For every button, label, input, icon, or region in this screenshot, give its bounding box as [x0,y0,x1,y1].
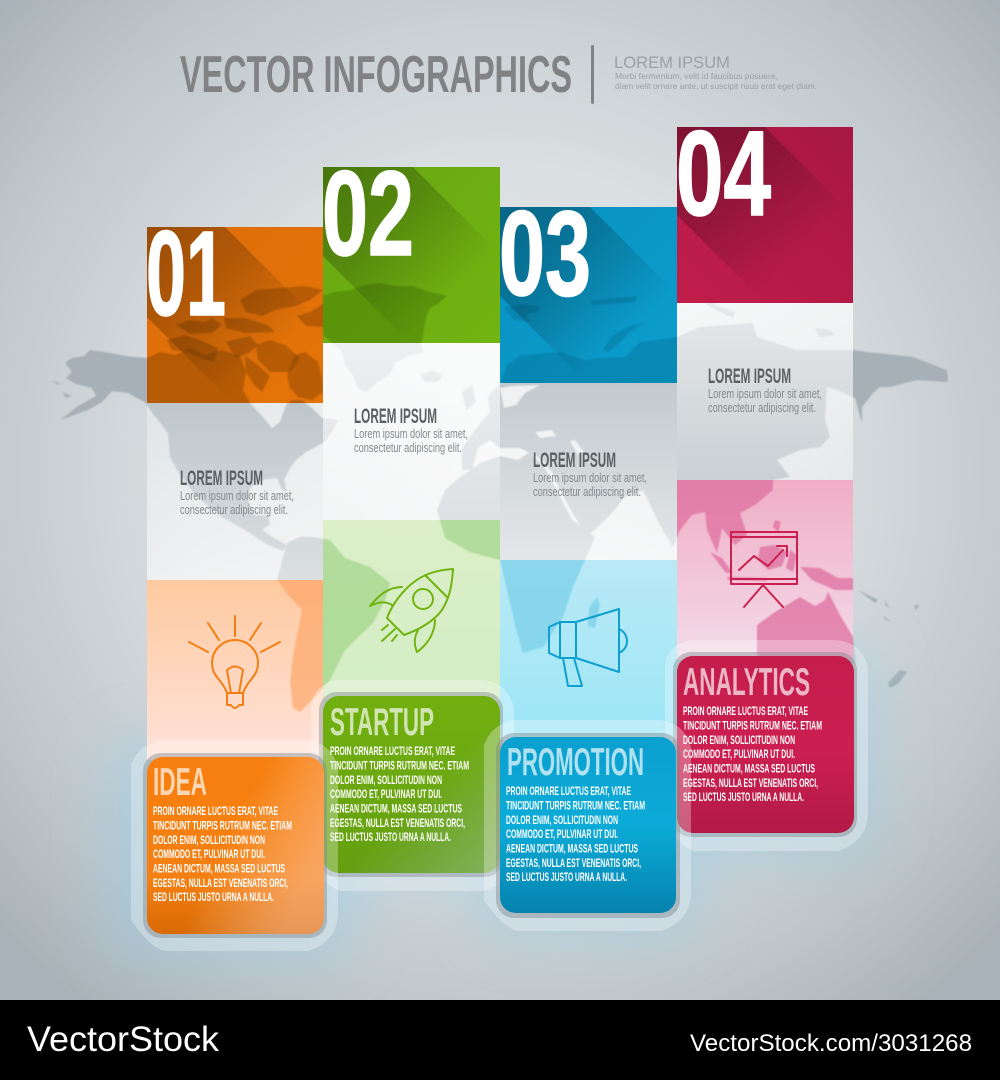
card: promotion: AENEAN DICTUM, MASSA SED LUCTUS [506,844,638,856]
card: startup: COMMODO ET, PULVINAR UT DUI. [330,789,442,801]
card: idea: PROIN ORNARE LUCTUS ERAT, VITAE [153,806,278,818]
subtitle block: Morbi fermentum, velit id faucibus posuere, [615,71,778,81]
panel: column 3 header [500,207,677,383]
card: promotion: TINCIDUNT TURPIS RUTRUM NEC. ETIAM [506,800,645,812]
card: analytics: COMMODO ET, PULVINAR UT DUI. [683,749,795,761]
world map [52,283,948,712]
number 02: 02 [322,145,414,281]
panel: column 3 icon area [500,560,677,740]
card: promotion: SED LUCTUS JUSTO URNA A NULLA. [506,872,627,884]
card: idea: DOLOR ENIM, SOLLICITUDIN NON [153,835,265,847]
text block: column 1: consectetur adipiscing elit. [180,503,288,517]
card: idea: TINCIDUNT TURPIS RUTRUM NEC. ETIAM [153,820,292,832]
watermark band: VectorStock [27,1020,220,1059]
blue glow under cards [115,650,870,950]
text block: column 2 [354,405,468,455]
text block: column 2: LOREM IPSUM [354,405,437,428]
text block: column 3 [533,449,647,499]
card: startup: STARTUP [330,701,434,744]
icon: megaphone [549,609,627,686]
card: promotion: EGESTAS, NULLA EST VENENATIS ORCI, [506,858,641,870]
watermark band [0,1000,1000,1080]
card: startup [311,680,514,891]
text block: column 4: consectetur adipiscing elit. [708,401,816,415]
panel: column 4 icon area [677,480,853,660]
card: idea: COMMODO ET, PULVINAR UT DUI. [153,849,265,861]
icon: presentation board [731,532,797,607]
panel: column 2 header [323,167,500,343]
card: promotion: DOLOR ENIM, SOLLICITUDIN NON [506,815,618,827]
panel: column 1 icon area [147,580,323,760]
text block: column 4: Lorem ipsum dolor sit amet, [708,387,822,401]
text block: column 3: LOREM IPSUM [533,449,616,472]
panel: column 4 header [676,105,853,303]
card: startup: SED LUCTUS JUSTO URNA A NULLA. [330,832,451,844]
card: analytics: SED LUCTUS JUSTO URNA A NULLA. [683,792,804,804]
title: VECTOR INFOGRAPHICS [180,46,572,104]
card: promotion [484,720,691,931]
text block: column 2: Lorem ipsum dolor sit amet, [354,427,468,441]
number 03: 03 [499,185,591,321]
panel: column 1 header [147,227,323,403]
card: idea: SED LUCTUS JUSTO URNA A NULLA. [153,892,274,904]
number 04: 04 [676,105,771,241]
card: startup: EGESTAS, NULLA EST VENENATIS ORCI, [330,818,465,830]
text block: column 4 [708,365,822,415]
card: analytics: ANALYTICS [683,661,810,704]
text block: column 1: LOREM IPSUM [180,467,263,490]
text block: column 2: consectetur adipiscing elit. [354,441,462,455]
card: analytics: AENEAN DICTUM, MASSA SED LUCTUS [683,764,815,776]
card: startup: AENEAN DICTUM, MASSA SED LUCTUS [330,804,462,816]
text block: column 4: LOREM IPSUM [708,365,791,388]
text block: column 1: Lorem ipsum dolor sit amet, [180,489,294,503]
card: analytics: EGESTAS, NULLA EST VENENATIS ORCI, [683,778,818,790]
card: analytics: DOLOR ENIM, SOLLICITUDIN NON [683,735,795,747]
card: promotion: PROIN ORNARE LUCTUS ERAT, VITAE [506,786,631,798]
card: idea: AENEAN DICTUM, MASSA SED LUCTUS [153,864,285,876]
icon: rocket [370,569,453,652]
card: startup: TINCIDUNT TURPIS RUTRUM NEC. ETIAM [330,760,469,772]
card: idea [131,740,338,951]
subtitle block: LOREM IPSUM [614,53,730,72]
card: idea: IDEA [153,761,207,804]
icon: light bulb [189,616,280,708]
card: analytics: TINCIDUNT TURPIS RUTRUM NEC. ETIAM [683,720,822,732]
card: promotion: COMMODO ET, PULVINAR UT DUI. [506,829,618,841]
text block: column 1 [180,467,294,517]
text block: column 3: consectetur adipiscing elit. [533,485,641,499]
title divider [591,45,594,104]
card: startup: DOLOR ENIM, SOLLICITUDIN NON [330,775,442,787]
watermark band: VectorStock.com/3031268 [690,1030,972,1057]
card: idea: EGESTAS, NULLA EST VENENATIS ORCI, [153,878,288,890]
card: analytics [665,640,868,851]
subtitle block [614,53,817,91]
subtitle block: diam velit ornare ante, ut suscipit risus erat eget diam. [615,81,817,91]
card: startup: PROIN ORNARE LUCTUS ERAT, VITAE [330,746,455,758]
middle panels [147,303,853,580]
number 01: 01 [146,205,226,341]
card: analytics: PROIN ORNARE LUCTUS ERAT, VITAE [683,706,808,718]
panel: column 2 icon area [323,520,500,700]
card: promotion: PROMOTION [507,741,644,784]
text block: column 3: Lorem ipsum dolor sit amet, [533,471,647,485]
